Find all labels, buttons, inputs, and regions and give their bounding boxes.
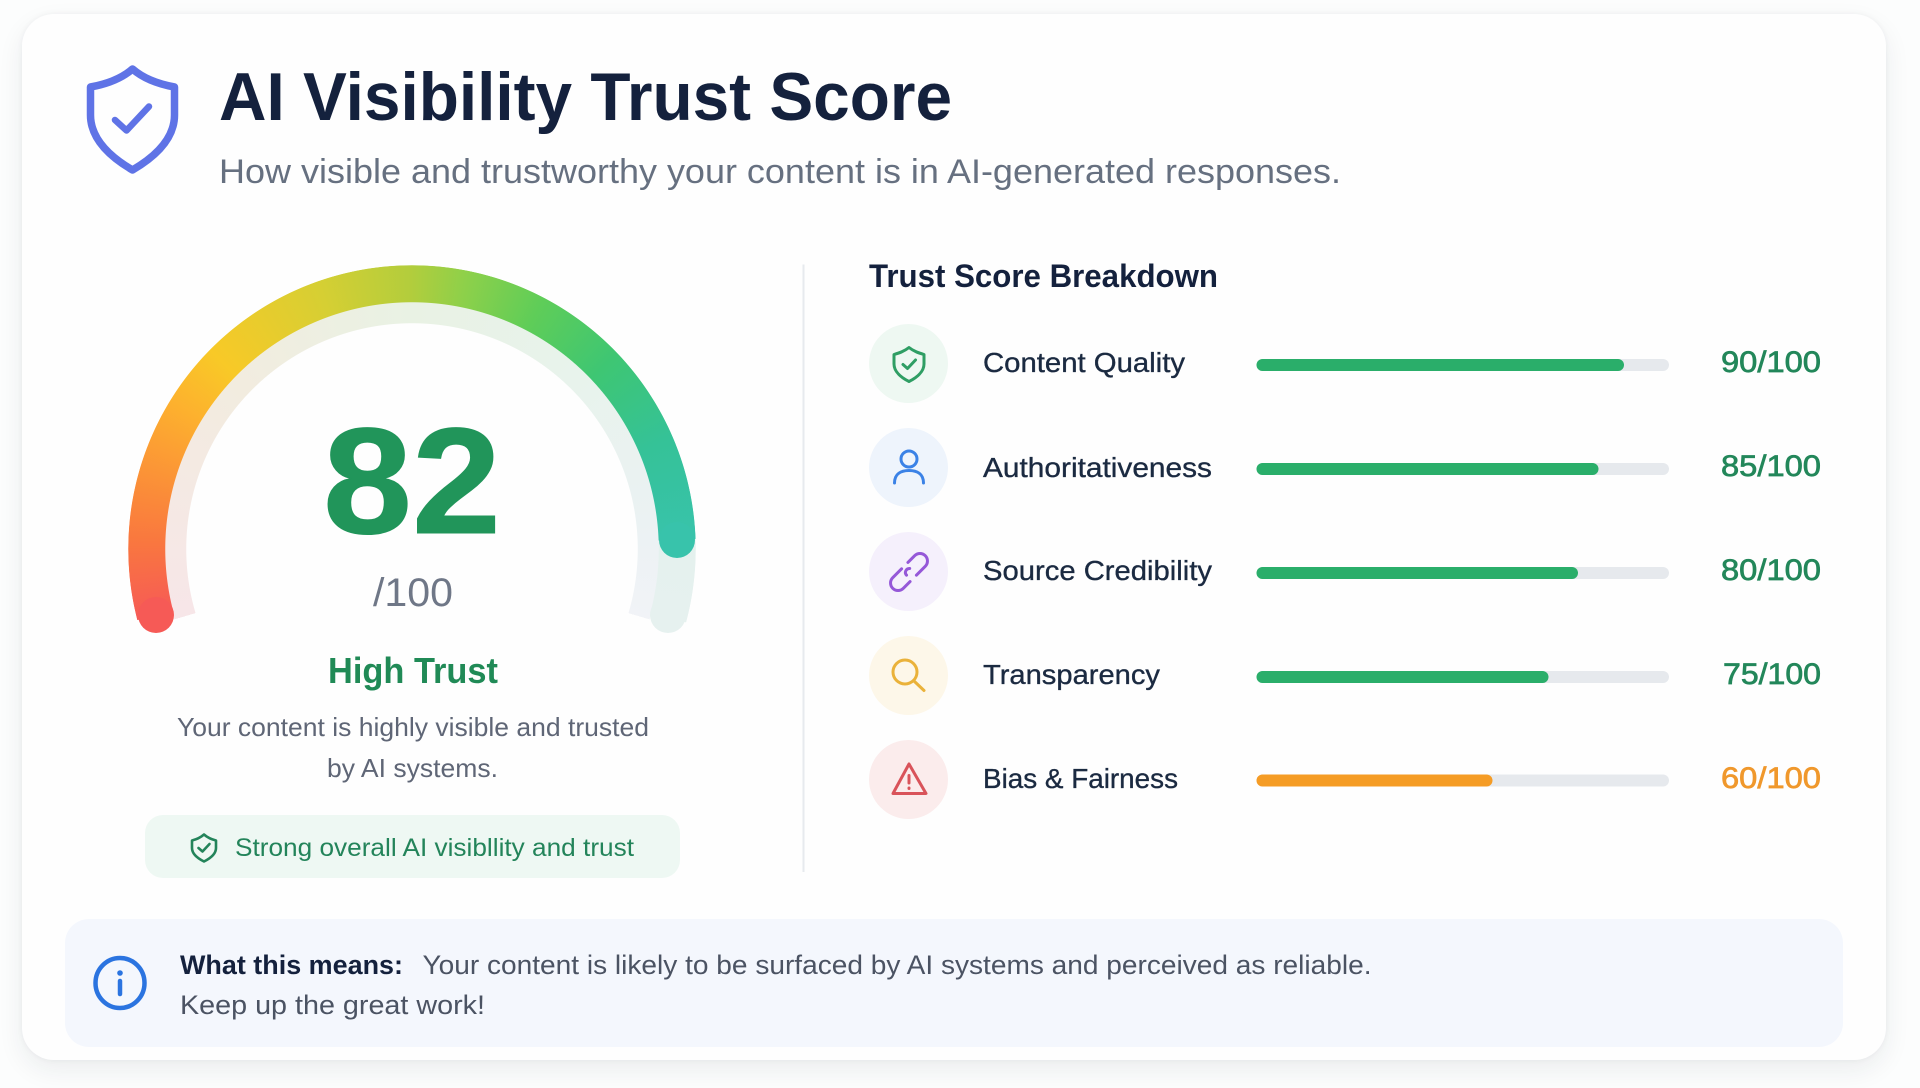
heading: breakdown: Trust Score Breakdown	[869, 258, 1218, 294]
icon: header shield with check	[90, 69, 174, 170]
subtitle: How visible and trustworthy your content is in AI-generated responses.	[219, 153, 1341, 191]
icon: info circle	[96, 958, 144, 1008]
gauge coloured band	[128, 265, 696, 620]
gauge score value: 82	[323, 396, 501, 565]
icon: small shield check	[192, 834, 216, 862]
row: transparency: 75/100	[1723, 658, 1821, 691]
row: authoritativeness: 85/100	[1721, 450, 1821, 483]
gauge light end cap	[650, 597, 686, 633]
row: authoritativeness	[869, 428, 1821, 507]
row: content quality: 90/100	[1721, 346, 1821, 379]
explanation text: Your content is likely to be surfaced by AI systems and perceived as reliable.	[422, 950, 1372, 980]
gauge light track	[165, 302, 659, 620]
trust level description: Your content is highly visible and trusted	[177, 712, 649, 742]
gauge score denominator: /100	[373, 571, 453, 615]
row: bias and fairness: 60/100	[1721, 762, 1821, 795]
gauge light remainder of the coloured band	[652, 539, 696, 622]
row: source credibility: 80/100	[1721, 554, 1821, 587]
explanation text	[180, 950, 1372, 1020]
chart: semicircular gauge arc	[128, 265, 696, 633]
callout: strong overall trust pill: Strong overall AI visibllity and trust	[235, 834, 634, 862]
row: content quality	[869, 324, 1821, 403]
title: AI Visibility Trust Score	[219, 59, 952, 135]
trust level description	[177, 712, 649, 783]
explanation text: What this means:	[180, 950, 403, 980]
row: source credibility: Source Credibility	[983, 555, 1212, 586]
row: transparency	[869, 636, 1821, 715]
row: source credibility	[869, 532, 1821, 611]
gauge end cap	[659, 522, 695, 558]
row: content quality: Content Quality	[983, 347, 1185, 378]
trust level description: by AI systems.	[327, 753, 498, 783]
explanation text: Keep up the great work!	[180, 990, 485, 1020]
gauge start cap	[138, 597, 174, 633]
icon: person	[894, 451, 924, 483]
callout: strong overall trust pill	[145, 815, 680, 878]
icon: magnifier	[893, 660, 924, 690]
divider	[802, 264, 804, 872]
row: transparency: Transparency	[983, 659, 1160, 690]
panel: what this means	[65, 919, 1843, 1047]
icon: shield check	[894, 348, 924, 382]
row: authoritativeness: Authoritativeness	[983, 452, 1212, 483]
row: bias and fairness: Bias & Fairness	[983, 763, 1178, 794]
row: bias and fairness	[869, 740, 1821, 819]
icon: warning triangle	[893, 764, 926, 794]
icon: chain link	[887, 550, 931, 594]
trust level label: High Trust	[328, 650, 498, 691]
